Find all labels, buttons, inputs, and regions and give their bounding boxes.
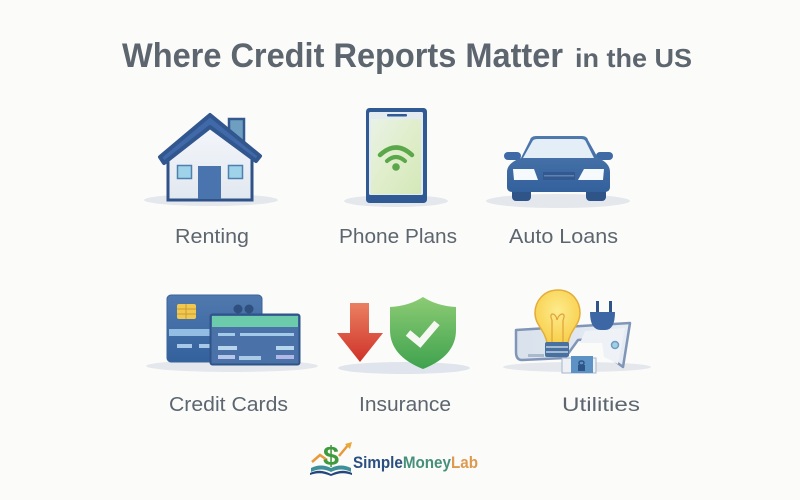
panel: auto loans: [486, 136, 630, 248]
title: Where Credit Reports Matter: [122, 37, 563, 75]
label: auto loans: Auto Loans: [509, 226, 618, 248]
panel: insurance: [337, 297, 470, 416]
icon: book with dollar and arrow: $: [323, 441, 339, 471]
label: credit cards: Credit Cards: [169, 394, 288, 416]
label: utilities: Utilities: [562, 395, 640, 416]
label: renting: Renting: [175, 226, 249, 248]
logo: SimpleMoneyLab: [310, 441, 478, 476]
icon: phone with wifi: [344, 108, 448, 207]
title: in the US: [575, 43, 692, 73]
wordmark: SimpleMoneyLab: [353, 454, 478, 472]
panel: utilities: [503, 290, 651, 416]
label: phone plans: Phone Plans: [339, 226, 457, 248]
panel: phone plans: [339, 108, 457, 248]
panel: renting: [144, 115, 278, 248]
icon: book with dollar and arrow: [310, 441, 352, 476]
icon: down arrow and shield: [337, 297, 470, 374]
icon: credit cards: [146, 295, 318, 372]
panel: credit cards: [146, 295, 318, 416]
icon: house: [144, 115, 278, 206]
icon: car: [486, 136, 630, 208]
label: insurance: Insurance: [359, 394, 451, 416]
icon: bulb, plug and panel: [503, 290, 651, 373]
